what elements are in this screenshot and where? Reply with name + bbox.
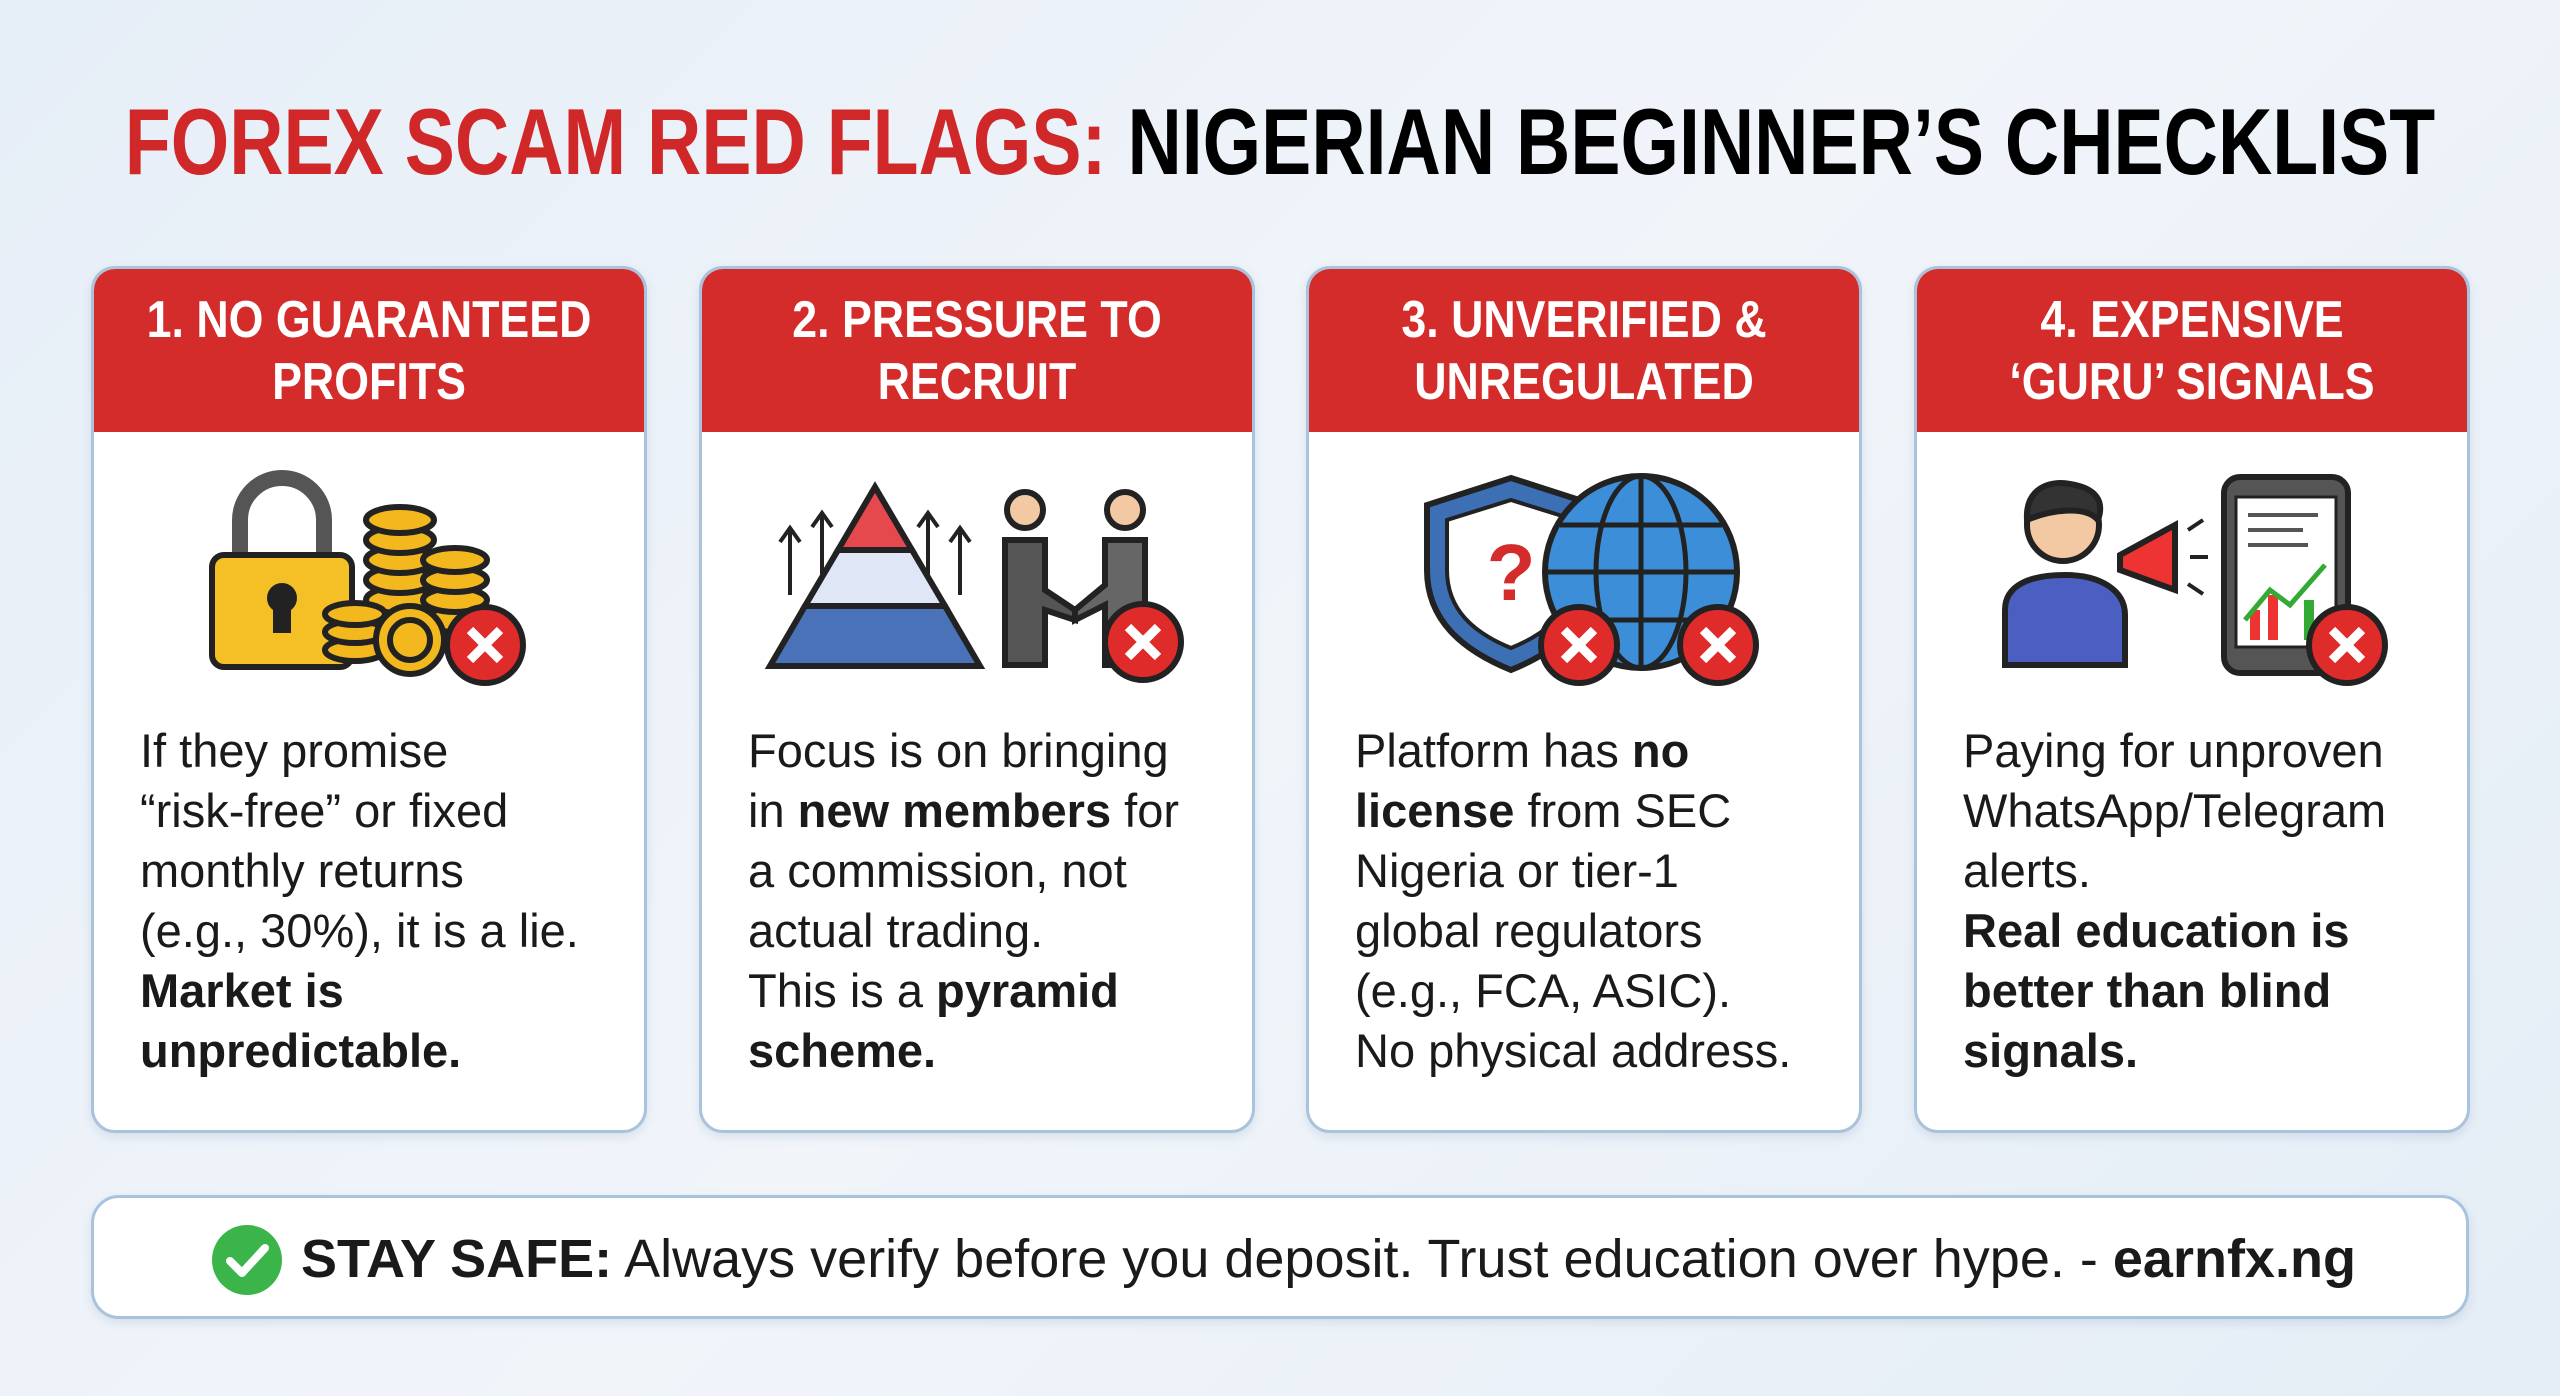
icon: lock and coins [212, 478, 523, 683]
text block 1: (e.g., 30%), it is a lie. [140, 904, 579, 957]
heading 2: 2. PRESSURE TO [792, 291, 1162, 349]
heading 1: PROFITS [272, 353, 466, 411]
callout text: STAY SAFE: Always verify before you deposit. Trust education over hype. - earnfx.ng [301, 1229, 2356, 1289]
icon: shield and globe [1427, 476, 1756, 683]
icon: shield and globe: ? [1487, 528, 1535, 617]
text block 3: license from SEC [1355, 784, 1731, 837]
text block 4: Paying for unproven [1963, 724, 2384, 777]
text block 2: in new members for [748, 784, 1179, 837]
text block 3: (e.g., FCA, ASIC). [1355, 964, 1731, 1017]
text block 4: Real education is [1963, 904, 2350, 957]
text block 3: Platform has no [1355, 724, 1689, 777]
text block 4: signals. [1963, 1024, 2138, 1077]
text block 3 [1355, 724, 1791, 1077]
text block 2 [748, 724, 1179, 1077]
text block 1: If they promise [140, 724, 448, 777]
title: FOREX SCAM RED FLAGS: NIGERIAN BEGINNER’S CHECKLIST [125, 89, 2435, 194]
text block 3: Nigeria or tier-1 [1355, 844, 1679, 897]
panel: no guaranteed profits [91, 266, 647, 1133]
text block 2: a commission, not [748, 844, 1127, 897]
heading 3 [1309, 269, 1859, 432]
heading 2: RECRUIT [878, 353, 1076, 411]
text block 1: unpredictable. [140, 1024, 461, 1077]
text block 4 [1963, 724, 2386, 1077]
heading 4: 4. EXPENSIVE [2040, 291, 2344, 349]
text block 3: global regulators [1355, 904, 1702, 957]
heading 3: UNREGULATED [1414, 353, 1754, 411]
text block 3: No physical address. [1355, 1024, 1791, 1077]
text block 1: Market is [140, 964, 344, 1017]
heading 2 [702, 269, 1252, 432]
text block 1: monthly returns [140, 844, 464, 897]
panel: unverified and unregulated [1306, 266, 1862, 1133]
text block 2: Focus is on bringing [748, 724, 1169, 777]
panel: pressure to recruit [699, 266, 1255, 1133]
text block 1 [140, 724, 579, 1077]
panel: expensive guru signals [1914, 266, 2470, 1133]
bottom callout bar [91, 1195, 2469, 1319]
icon: pyramid and handshake [770, 487, 1181, 680]
heading 4 [1917, 269, 2467, 432]
icon: green check [212, 1225, 282, 1295]
icon: guru megaphone and phone chart [2005, 477, 2385, 683]
text block 4: alerts. [1963, 844, 2091, 897]
heading 3: 3. UNVERIFIED & [1401, 291, 1767, 349]
text block 4: better than blind [1963, 964, 2331, 1017]
heading 1 [94, 269, 644, 432]
text block 2: actual trading. [748, 904, 1043, 957]
text block 4: WhatsApp/Telegram [1963, 784, 2386, 837]
text block 2: This is a pyramid [748, 964, 1119, 1017]
text block 1: “risk-free” or fixed [140, 784, 508, 837]
heading 1: 1. NO GUARANTEED [147, 291, 591, 349]
heading 4: ‘GURU’ SIGNALS [2009, 353, 2375, 411]
text block 2: scheme. [748, 1024, 936, 1077]
